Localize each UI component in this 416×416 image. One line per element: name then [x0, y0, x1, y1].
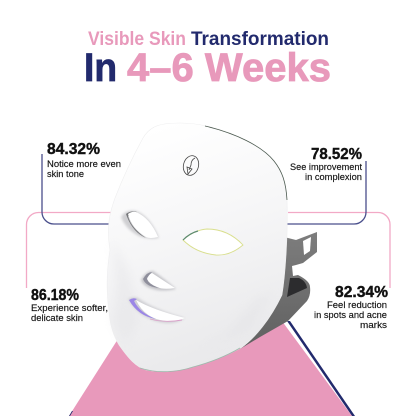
right eye opening — [183, 229, 243, 255]
stat: 86.18%: delicate skin — [31, 313, 83, 324]
heading line: Visible Skin Transformation — [88, 28, 329, 50]
navy connector lines — [42, 154, 366, 224]
left eye opening — [121, 211, 159, 239]
stat: 78.52%: 78.52% — [311, 146, 362, 163]
title — [84, 28, 331, 90]
mask rim shadow — [205, 126, 287, 200]
heading line: Visible Skin Transformation: Transformation — [191, 28, 329, 50]
stat: 86.18%: 86.18% — [31, 287, 79, 304]
stat: 86.18%: Experience softer, — [31, 303, 108, 314]
stat: 84.32%: Notice more even — [47, 159, 121, 170]
logo emblem — [181, 154, 201, 177]
mask bottom rim — [140, 348, 240, 372]
stat: 78.52%: in complexion — [305, 172, 362, 183]
LED face mask — [107, 123, 317, 372]
stat: 82.34% — [314, 284, 388, 331]
stat: 78.52%: See improvement — [290, 162, 362, 173]
stat: 78.52% — [290, 146, 362, 183]
mouth opening — [128, 297, 185, 323]
stat: 82.34%: in spots and acne — [314, 310, 387, 321]
heading line: In 4–6 Weeks: In — [84, 46, 117, 90]
mask shell — [107, 123, 287, 371]
heading line: In 4–6 Weeks: 4–6 Weeks — [127, 46, 331, 90]
pink triangle base — [69, 210, 355, 416]
stat: 84.32% — [47, 141, 121, 180]
stat: 82.34%: marks — [360, 320, 387, 331]
heading line: Visible Skin Transformation: Visible Skin — [88, 28, 186, 50]
stat: 82.34%: Feel reduction — [327, 300, 387, 311]
nose opening — [141, 271, 176, 290]
mask strap — [236, 232, 317, 349]
stat: 86.18% — [31, 287, 108, 324]
stat: 84.32%: 84.32% — [47, 141, 100, 158]
stat: 84.32%: skin tone — [47, 169, 84, 180]
pink connector lines — [26, 212, 390, 288]
stat: 82.34%: 82.34% — [335, 284, 388, 301]
mask facial shading — [112, 240, 275, 350]
